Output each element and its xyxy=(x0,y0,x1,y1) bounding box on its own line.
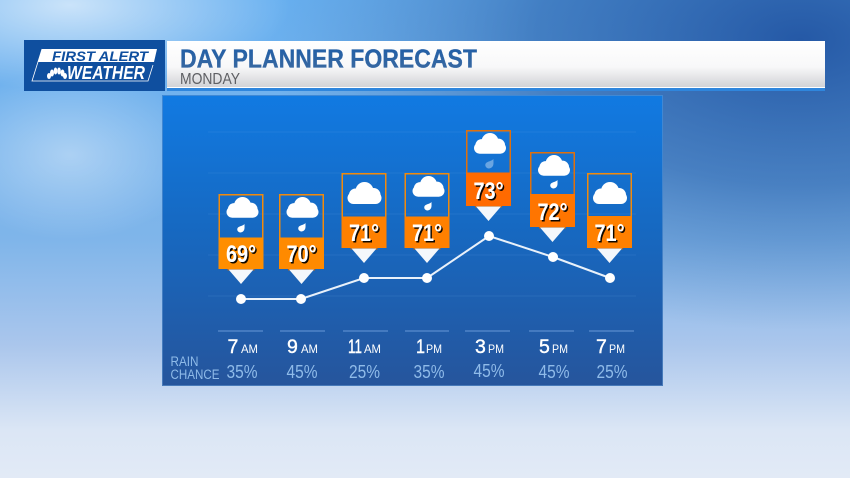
temperature line chart xyxy=(236,231,615,304)
time row: AM xyxy=(364,342,381,356)
time row: PM xyxy=(552,342,568,356)
card: 7 PM 71 degrees xyxy=(587,174,632,263)
card: 9 AM 70 degrees xyxy=(279,195,324,284)
rain chance row: 45% xyxy=(286,361,318,382)
time row: 9 xyxy=(287,336,298,358)
time row: 3 xyxy=(475,336,486,358)
card: 9 AM 70 degrees: 70° xyxy=(286,241,316,268)
time row: 7 xyxy=(228,336,238,358)
card: 11 AM 71 degrees: 71° xyxy=(349,220,379,247)
rain chance row xyxy=(170,354,628,382)
time row: AM xyxy=(301,342,318,356)
forecast panel xyxy=(162,95,663,386)
logo: First Alert Weather xyxy=(24,40,165,91)
time row: 5 xyxy=(539,336,550,358)
rain chance row: 25% xyxy=(596,361,628,382)
time row: 7 xyxy=(596,336,607,358)
time row: 1 xyxy=(416,336,425,358)
card: 3 PM 73 degrees xyxy=(466,131,511,221)
logo: First Alert Weather: WEATHER xyxy=(67,62,146,83)
card: 5 PM 72 degrees xyxy=(530,153,575,242)
card: 7 AM 69 degrees: 69° xyxy=(226,241,256,268)
card: 1 PM 71 degrees: 71° xyxy=(412,220,442,247)
card: 1 PM 71 degrees xyxy=(404,174,450,263)
time row: PM xyxy=(488,342,504,356)
logo: First Alert Weather: FIRST ALERT xyxy=(52,48,150,64)
rain chance row: 45% xyxy=(474,360,504,381)
card: 3 PM 73 degrees: 73° xyxy=(474,178,504,205)
subheading: Monday: MONDAY xyxy=(180,71,240,88)
rain chance row: RAIN xyxy=(170,354,198,369)
time row xyxy=(218,331,634,358)
heading: Day Planner Forecast: DAY PLANNER FORECAST xyxy=(180,45,477,73)
rain chance row: 25% xyxy=(349,361,380,382)
rain chance row: 35% xyxy=(414,361,444,382)
time row: 11 xyxy=(348,336,362,358)
card: 7 AM 69 degrees xyxy=(218,195,264,284)
time row: PM xyxy=(609,342,625,356)
card: 11 AM 71 degrees xyxy=(342,174,386,263)
card: 5 PM 72 degrees: 72° xyxy=(538,199,568,226)
rain chance row: 45% xyxy=(538,361,570,382)
rain chance row: 35% xyxy=(226,361,258,382)
time row: PM xyxy=(426,342,442,356)
card: 7 PM 71 degrees: 71° xyxy=(594,220,624,247)
time row: AM xyxy=(241,342,258,356)
title bar xyxy=(167,41,825,91)
rain chance row: CHANCE xyxy=(170,367,220,382)
